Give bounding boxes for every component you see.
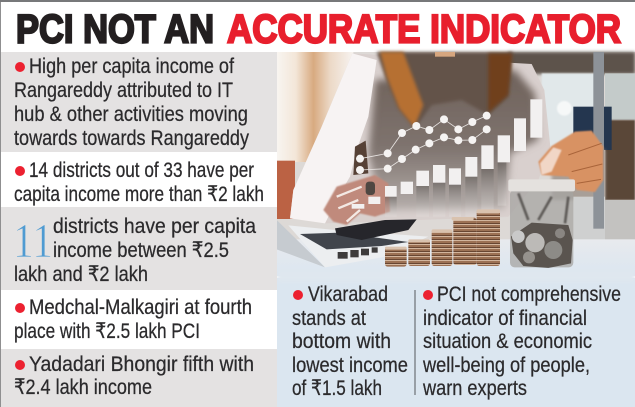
bullet [15, 62, 25, 72]
text block: High per capita income of [29, 54, 234, 78]
lines: Vikarabad [308, 282, 388, 306]
text block: ₹2.4 lakh income [14, 375, 152, 399]
text block: place with ₹2.5 lakh PCI [14, 319, 200, 343]
lines [292, 282, 408, 400]
phone shadow [353, 141, 368, 175]
text block: Rangareddy attributed to IT [14, 78, 233, 102]
text block: Medchal-Malkagiri at fourth [29, 295, 252, 319]
panel: 11 districts [1, 207, 277, 290]
left hand [323, 175, 390, 225]
text block: income between ₹2.5 [53, 238, 229, 262]
bullet [15, 303, 25, 313]
text block: Yadadari Bhongir fifth with [29, 352, 254, 376]
text block [14, 295, 252, 343]
panel: Rangareddy [1, 52, 277, 152]
photo bottom blend [277, 270, 635, 282]
coin stacks [385, 209, 500, 267]
text block: towards towards Rangareddy [14, 126, 249, 150]
title: black part: PCI NOT AN [16, 8, 214, 52]
top rule [0, 0, 635, 2]
text block [14, 214, 256, 286]
bullet [293, 290, 303, 300]
lines: stands at [292, 306, 366, 330]
text block: lakh and ₹2 lakh [14, 262, 148, 286]
photo background [277, 52, 635, 252]
bullet [15, 166, 25, 176]
table [277, 239, 635, 276]
left column background strip [0, 2, 1, 407]
right hand [538, 131, 603, 192]
big numeral 11: 11 [13, 213, 53, 268]
woman [290, 52, 550, 223]
text block: Vikarabad [292, 282, 408, 400]
text block: PCI not comprehensive [422, 282, 621, 400]
lines [422, 282, 621, 400]
chart overlay: dotted lines [356, 112, 491, 174]
photo: woman with calculator, chart overlay, coins [277, 52, 635, 276]
lines: well-being of people, [422, 353, 590, 377]
text block [14, 352, 254, 399]
text block: 14 districts out of 33 have per [29, 158, 254, 182]
panel: experts and Vikarabad background [277, 278, 635, 407]
panel: 14 districts [1, 152, 277, 207]
lines: indicator of financial [423, 306, 587, 330]
lines: situation & economic [423, 329, 592, 353]
title [16, 8, 621, 52]
sweater [290, 53, 550, 223]
text block [14, 158, 264, 206]
lines: lowest income [292, 353, 408, 377]
text block: hub & other activities moving [14, 102, 248, 126]
torso shadow [368, 70, 538, 210]
left sleeve [290, 53, 377, 223]
panel: Yadadari Bhongir [1, 349, 277, 407]
bullet [15, 360, 25, 370]
panel: Medchal-Malkagiri [1, 290, 277, 349]
lines: bottom with [292, 329, 391, 353]
divider [414, 290, 416, 395]
hair [377, 52, 512, 128]
lines: of ₹1.5 lakh [292, 376, 382, 400]
lines: warn experts [422, 376, 527, 400]
chart overlay: bars [352, 99, 542, 217]
bullet [423, 290, 433, 300]
glass jar with coins [508, 179, 575, 268]
text block [14, 54, 249, 150]
text block: districts have per capita [53, 214, 256, 238]
text block: capita income more than ₹2 lakh [14, 182, 264, 206]
laptop [277, 219, 428, 267]
